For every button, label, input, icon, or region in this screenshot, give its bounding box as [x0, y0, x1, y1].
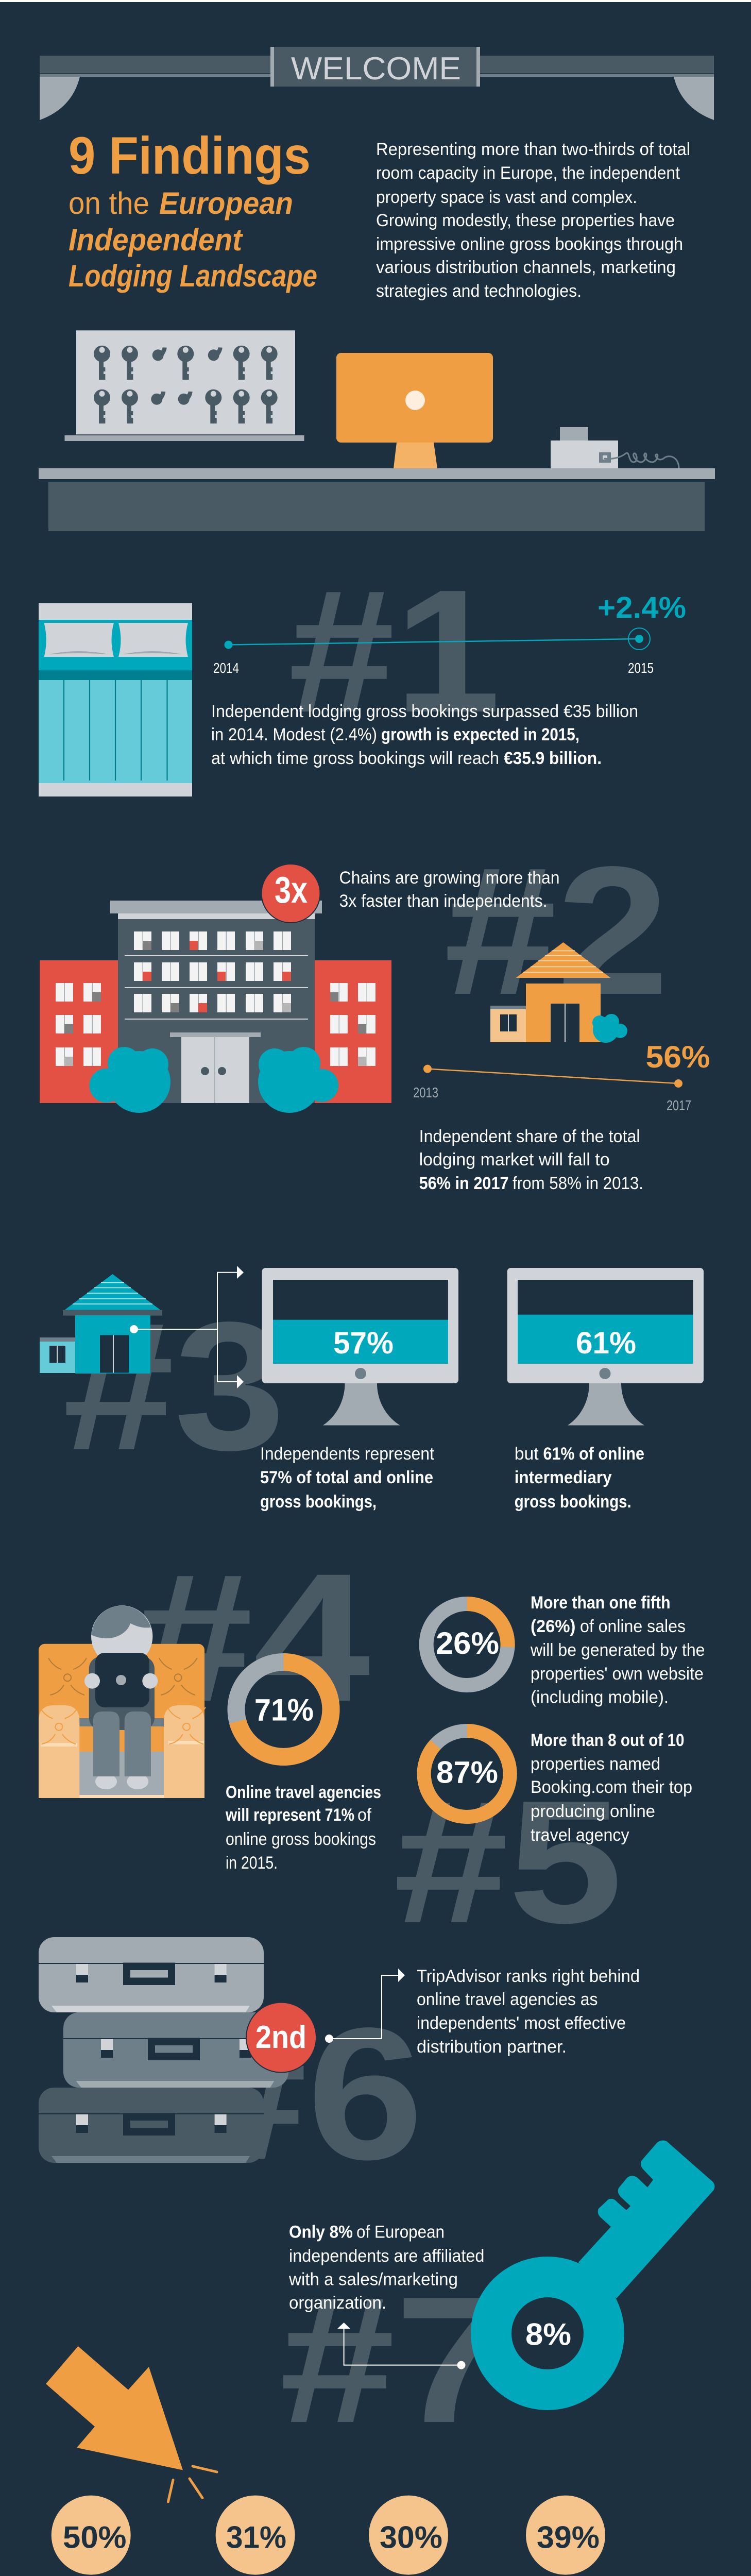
finding 3 text right	[515, 1444, 644, 1512]
badge: 3x	[262, 864, 320, 923]
donut chart: 26%: 26%	[436, 1626, 499, 1660]
finding 7 text	[288, 2223, 484, 2313]
growth line chart	[213, 591, 686, 676]
title: European	[159, 186, 293, 221]
finding 7 text: of European	[356, 2223, 445, 2242]
chains text	[339, 868, 559, 911]
icon: person in armchair with tablet	[39, 1605, 206, 1798]
finding 7 text: independents are affiliated	[289, 2246, 484, 2266]
share line chart	[413, 1040, 710, 1113]
stat: 50% internet booking engine: 50%	[63, 2520, 127, 2554]
growth line chart: +2.4%	[598, 591, 686, 624]
finding 5 text: 87%: properties named	[531, 1754, 660, 1774]
finding 4 text: Online travel agencies	[226, 1783, 381, 1802]
finding 1 text: growth is expected in 2015,	[381, 725, 579, 744]
finding 3 text left: 57% of total and online	[260, 1468, 433, 1487]
share line chart: 2013	[413, 1084, 438, 1100]
finding 1 text: €35.9 billion.	[504, 749, 602, 768]
finding 3 text right: 61% of online	[543, 1444, 644, 1464]
welcome sign: WELCOME	[291, 51, 461, 87]
finding 5 text: 87%: travel agency	[531, 1825, 629, 1845]
finding 2 text	[419, 1127, 643, 1193]
finding 5 text: 87%: More than 8 out of 10	[531, 1731, 684, 1750]
stat: 39% channel manager: 39%	[537, 2520, 600, 2554]
finding 7 text: organization.	[289, 2293, 386, 2313]
icon: teal house	[40, 1274, 162, 1374]
connector arrow to affiliation text	[337, 2323, 466, 2369]
share line chart: 56%	[646, 1040, 710, 1074]
finding number 5: #5	[394, 1764, 623, 1960]
finding number 1: #1	[288, 553, 501, 749]
badge: 2nd: 2nd	[255, 2020, 306, 2055]
intro text: various distribution channels, marketing	[376, 258, 676, 277]
finding 1 text	[211, 702, 638, 768]
finding number 2: #2	[444, 829, 669, 1033]
stat: 30% central reservation system	[367, 2496, 514, 2576]
icon: chain hotel	[40, 901, 391, 1113]
donut chart: 87%: 87%	[436, 1755, 498, 1790]
icon: desktop monitor	[336, 353, 493, 468]
finding 7 text: with a sales/marketing	[288, 2270, 458, 2290]
title: Lodging Landscape	[69, 259, 317, 293]
finding 2 text: lodging market will fall to	[419, 1150, 610, 1170]
finding 1 text: in 2014. Modest (2.4%)	[211, 725, 377, 744]
finding 2 text: from 58% in 2013.	[513, 1174, 643, 1193]
badge: 2nd	[246, 2003, 316, 2073]
stat: 30% central reservation system: 30%	[380, 2520, 442, 2554]
finding 5 text: 26%: will be generated by the	[530, 1640, 705, 1660]
finding 5 text: 26%: (26%)	[531, 1617, 575, 1636]
icon: reception phone	[551, 427, 679, 468]
finding 2 text: Independent share of the total	[419, 1127, 640, 1146]
finding 2 text: 56% in 2017	[419, 1174, 509, 1193]
intro text	[376, 140, 690, 301]
icon: cursor arrow clicking	[46, 2346, 217, 2502]
finding 4 text: in 2015.	[226, 1853, 278, 1873]
icon: bed	[39, 603, 192, 796]
donut chart: 71%	[236, 1662, 331, 1757]
stat: 50% internet booking engine	[50, 2496, 185, 2576]
finding 3 text right: intermediary	[515, 1468, 612, 1487]
finding number 4: #4	[135, 1536, 372, 1740]
finding 5 text: 87%: producing online	[531, 1802, 655, 1821]
connector arrow to TripAdvisor text	[325, 1969, 405, 2043]
finding 5 text: 26%: More than one fifth	[531, 1593, 671, 1613]
finding number 3: #3	[63, 1284, 285, 1488]
finding 1 text: at which time gross bookings will reach	[211, 749, 499, 768]
reception desk	[39, 468, 715, 531]
finding 5 text: 87%	[531, 1731, 692, 1845]
chains text: 3x faster than independents.	[339, 891, 547, 911]
intro text: room capacity in Europe, the independent	[376, 163, 680, 183]
title	[69, 126, 317, 293]
finding 4 text: will represent 71%	[225, 1805, 354, 1825]
finding 1 text: Independent lodging gross bookings surpassed €35 billion	[211, 702, 638, 721]
finding 6 text: online travel agencies as	[417, 1990, 598, 2009]
donut chart: 26%	[426, 1604, 508, 1685]
finding 3 text right: gross bookings.	[515, 1492, 631, 1512]
finding 3 text right: but	[515, 1444, 539, 1464]
stat: 31% property management system	[214, 2496, 329, 2576]
donut chart: 87%	[424, 1731, 510, 1817]
icon: key board	[65, 330, 304, 441]
donut chart: 71%: 71%	[254, 1693, 314, 1727]
icon: big key with 8%: 8%	[525, 2317, 571, 2352]
intro text: property space is vast and complex.	[376, 188, 637, 207]
finding 4 text: of	[357, 1805, 372, 1825]
badge: 3x: 3x	[275, 870, 308, 911]
monitor: 61%: 61%	[576, 1326, 636, 1360]
monitor: 57%: 57%	[333, 1326, 394, 1360]
growth line chart: 2015	[628, 660, 654, 676]
finding 5 text: 87%: Booking.com their top	[531, 1777, 692, 1797]
finding 3 text left: gross bookings,	[260, 1492, 377, 1512]
finding 6 text	[417, 1967, 640, 2057]
monitor: 57%	[262, 1268, 458, 1425]
stat: 31% property management system: 31%	[226, 2520, 286, 2554]
welcome sign	[40, 47, 714, 120]
finding 3 text left	[260, 1444, 435, 1512]
intro text: strategies and technologies.	[376, 281, 582, 301]
icon: orange independent house	[490, 942, 627, 1043]
chains text: Chains are growing more than	[339, 868, 559, 888]
finding number 6: #6	[191, 1989, 423, 2199]
connector arrows to monitors	[130, 1266, 244, 1388]
finding 3 text left: Independents represent	[260, 1444, 435, 1464]
title: Independent	[69, 223, 244, 257]
finding 4 text: online gross bookings	[226, 1829, 376, 1849]
growth line chart: 2014	[213, 660, 239, 676]
finding 7 text: Only 8%	[289, 2223, 353, 2242]
finding 6 text: TripAdvisor ranks right behind	[417, 1967, 640, 1986]
finding 5 text: 26%	[530, 1593, 705, 1707]
intro text: impressive online gross bookings through	[376, 234, 683, 254]
finding 5 text: 26%: properties' own website	[531, 1664, 704, 1684]
icon: stacked suitcases	[39, 1937, 288, 2163]
finding 5 text: 26%: (including mobile).	[531, 1688, 669, 1707]
icon: big key with 8%	[471, 2140, 714, 2410]
share line chart: 2017	[667, 1097, 691, 1113]
finding 4 text	[225, 1783, 381, 1873]
finding 6 text: independents' most effective	[417, 2013, 626, 2033]
finding 6 text: distribution partner.	[417, 2037, 567, 2057]
intro text: Growing modestly, these properties have	[376, 211, 675, 230]
finding number 7: #7	[280, 2259, 510, 2461]
finding 5 text: 26%: of online sales	[580, 1617, 686, 1636]
title: 9 Findings	[69, 126, 311, 185]
monitor: 61%	[507, 1268, 704, 1425]
stat: 39% channel manager	[524, 2496, 635, 2576]
intro text: Representing more than two-thirds of total	[376, 140, 690, 159]
title: on the	[69, 186, 149, 221]
